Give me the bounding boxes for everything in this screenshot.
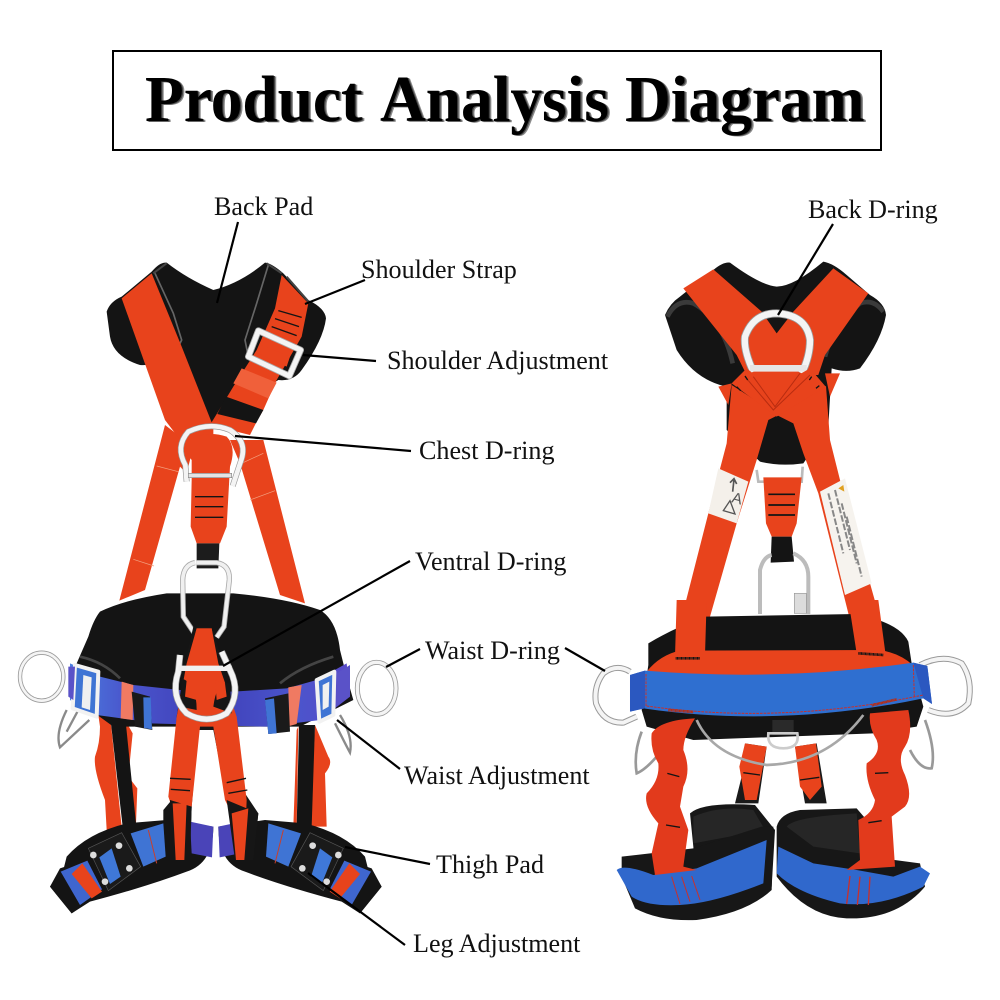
rear center straps: [735, 743, 827, 803]
title: Product: [148, 64, 365, 136]
side leg straps: [95, 715, 137, 830]
center tab: [757, 467, 803, 563]
metal half ring: [697, 715, 863, 765]
label: Shoulder Adjustment: Shoulder Adjustment: [387, 346, 609, 375]
back D-ring: [745, 313, 810, 373]
waist D-ring right: [357, 662, 396, 714]
carabiner: [760, 553, 808, 614]
thigh center straps: [173, 803, 248, 860]
waist pad: [77, 593, 353, 727]
title: [145, 63, 867, 136]
ventral D-ring: [176, 628, 235, 719]
label: Waist D-ring: Waist D-ring: [425, 636, 560, 665]
shoulder padding: [665, 262, 886, 465]
waist pad: [642, 614, 923, 740]
red upper belt: [647, 650, 913, 680]
small side rings: [58, 710, 351, 753]
title: Diagram: [626, 64, 866, 136]
label: Chest D-ring: Chest D-ring: [419, 436, 555, 465]
title: Diagram: [628, 64, 867, 136]
shoulder buckle: [248, 331, 301, 376]
back pad: [107, 263, 326, 425]
title: Product: [146, 64, 364, 136]
waist D-ring left: [20, 653, 63, 701]
label: Thigh Pad: Thigh Pad: [436, 850, 544, 879]
title: Analysis: [381, 64, 610, 136]
title: Analysis: [380, 63, 609, 135]
thigh pad right: [218, 820, 382, 913]
lower front harness: [20, 563, 396, 913]
left back strap: [676, 385, 778, 640]
label: Waist Adjustment: Waist Adjustment: [404, 761, 590, 790]
leader lines: [217, 222, 833, 945]
side rings: [636, 720, 933, 773]
label: Ventral D-ring: Ventral D-ring: [415, 547, 566, 576]
label: product information: [820, 478, 872, 595]
upper front harness: [107, 263, 326, 603]
label: arrow and A: A: [730, 489, 745, 509]
chest D-ring: [181, 426, 243, 486]
center straps: [163, 627, 258, 860]
belt keepers: [121, 682, 302, 734]
carabiner: [183, 563, 229, 637]
lower back harness: [595, 600, 970, 920]
thigh pad left: [50, 820, 213, 913]
waist D-ring left: [595, 668, 637, 723]
title box: [113, 51, 881, 150]
title: Diagram: [625, 63, 864, 135]
right back strap: [777, 386, 886, 640]
lower crossing straps: [230, 440, 305, 603]
waist belt: [70, 663, 350, 727]
waist D-ring right: [920, 659, 970, 714]
chest D-ring tab: [186, 434, 233, 543]
diamond strap join: [732, 368, 826, 417]
label: Shoulder Strap: Shoulder Strap: [361, 255, 517, 284]
label: Back D-ring: Back D-ring: [808, 195, 938, 224]
small rear D-ring: [768, 720, 798, 748]
label: Back Pad: Back Pad: [214, 192, 313, 221]
rear thigh pad left: [617, 804, 775, 920]
title: Analysis: [382, 64, 611, 136]
label: Leg Adjustment: Leg Adjustment: [413, 929, 581, 958]
label: arrow and A: [708, 468, 748, 523]
rear thigh pad right: [777, 808, 930, 918]
back shoulder straps into belt: [675, 600, 886, 657]
front harness photo: [20, 263, 396, 913]
thigh strap overlays: [170, 800, 258, 860]
right shoulder strap: [210, 275, 308, 435]
wavy leg strap left: [646, 718, 697, 875]
shoulder straps: [683, 268, 868, 375]
left shoulder strap: [122, 273, 213, 448]
title: Product: [145, 63, 363, 135]
back harness photo: [595, 262, 970, 920]
upper back harness: [665, 262, 886, 640]
wavy leg strap right: [847, 710, 910, 870]
waist adjustment buckles: [68, 665, 350, 722]
blue waist belt: [630, 663, 932, 716]
